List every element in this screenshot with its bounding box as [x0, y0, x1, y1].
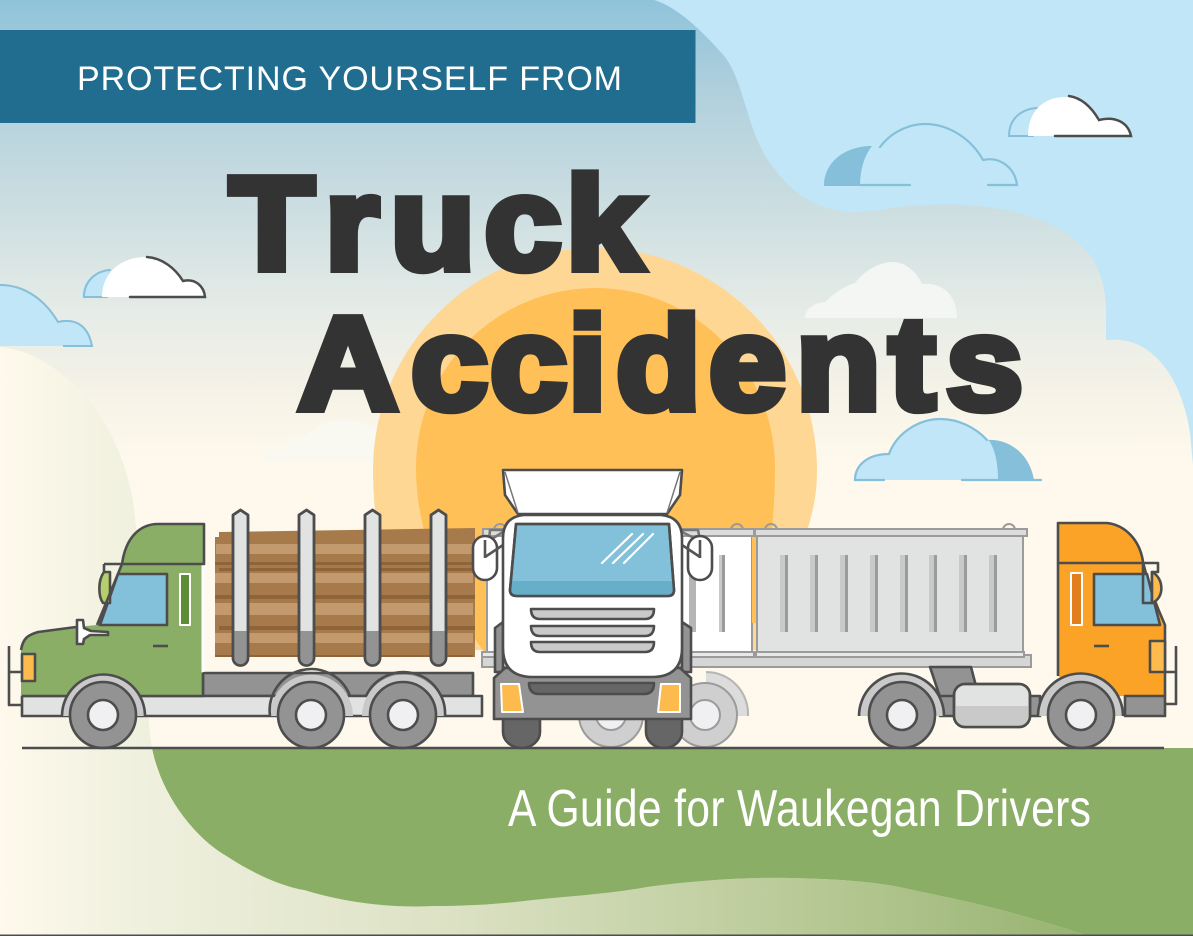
spoiler [503, 470, 682, 514]
rear fenders [270, 675, 353, 716]
door handle [1094, 645, 1109, 647]
door handle [153, 645, 168, 647]
title [230, 149, 1023, 437]
mirror [98, 564, 122, 603]
hood ornament [77, 620, 108, 644]
truck: green logging truck [9, 510, 482, 748]
stakes [233, 510, 446, 666]
banner text: PROTECTING YOURSELF FROM [77, 60, 622, 98]
faded rear wheels [579, 672, 748, 747]
hill and lower gradient [0, 347, 1088, 936]
white cab edge [202, 565, 204, 672]
mirrors [473, 530, 712, 580]
cab roof fairing [122, 524, 204, 564]
cloud: top right white [1009, 96, 1131, 136]
cab body [1058, 523, 1165, 696]
bumper [1125, 696, 1165, 716]
white container [487, 535, 752, 655]
cloud: lower right blue [855, 419, 1041, 480]
grille bars [531, 609, 654, 652]
green ground [152, 748, 1193, 936]
sun [373, 248, 817, 652]
windshield glare [602, 534, 653, 563]
fog lights [501, 684, 680, 712]
cab face [503, 515, 682, 677]
container hooks [494, 524, 1015, 530]
cloud: left blue [0, 285, 92, 346]
front fender [62, 674, 145, 716]
cloud: faded upper [805, 262, 957, 318]
flatbed [203, 673, 473, 696]
cloud: faded lower [262, 420, 380, 462]
grille guard [9, 646, 21, 705]
window [1094, 574, 1160, 625]
title: Truck [230, 149, 644, 297]
wheels [70, 682, 436, 748]
bumper slot [529, 683, 654, 694]
side vent [180, 574, 190, 625]
wheels [869, 682, 1114, 748]
grille guard [1165, 646, 1176, 704]
mirror [1143, 563, 1158, 603]
logs [215, 528, 475, 657]
chassis strip [22, 696, 482, 716]
header banner [0, 30, 696, 123]
tires [503, 715, 682, 748]
windshield [510, 524, 674, 596]
bottom edge line [0, 934, 1193, 936]
trailer mount [930, 667, 977, 697]
windshield pillar [97, 564, 122, 625]
orange gap [752, 535, 757, 623]
subtitle: A Guide for Waukegan Drivers [508, 780, 1091, 838]
cloud: top right outlined [824, 124, 1017, 186]
frame link [940, 696, 1040, 716]
cab body [21, 564, 203, 696]
lamp [1150, 641, 1165, 672]
side panels [495, 622, 691, 672]
container ribs [689, 555, 997, 632]
bumper [494, 668, 691, 719]
light blue sky blob [654, 0, 1193, 465]
bottom rails [482, 655, 1031, 667]
truck: white front-view cab [473, 470, 712, 748]
road line [22, 747, 1164, 749]
window [100, 574, 167, 625]
fuel tank [954, 684, 1030, 727]
truck: orange tractor [859, 523, 1176, 748]
side vent [1071, 573, 1082, 625]
fenders [859, 674, 944, 716]
top rails [483, 529, 754, 536]
grey container [757, 535, 1023, 655]
truck: white container trailer behind [482, 524, 1031, 747]
cloud: left white [82, 257, 205, 297]
headlight [22, 654, 35, 681]
title: Accidents [298, 289, 1023, 437]
